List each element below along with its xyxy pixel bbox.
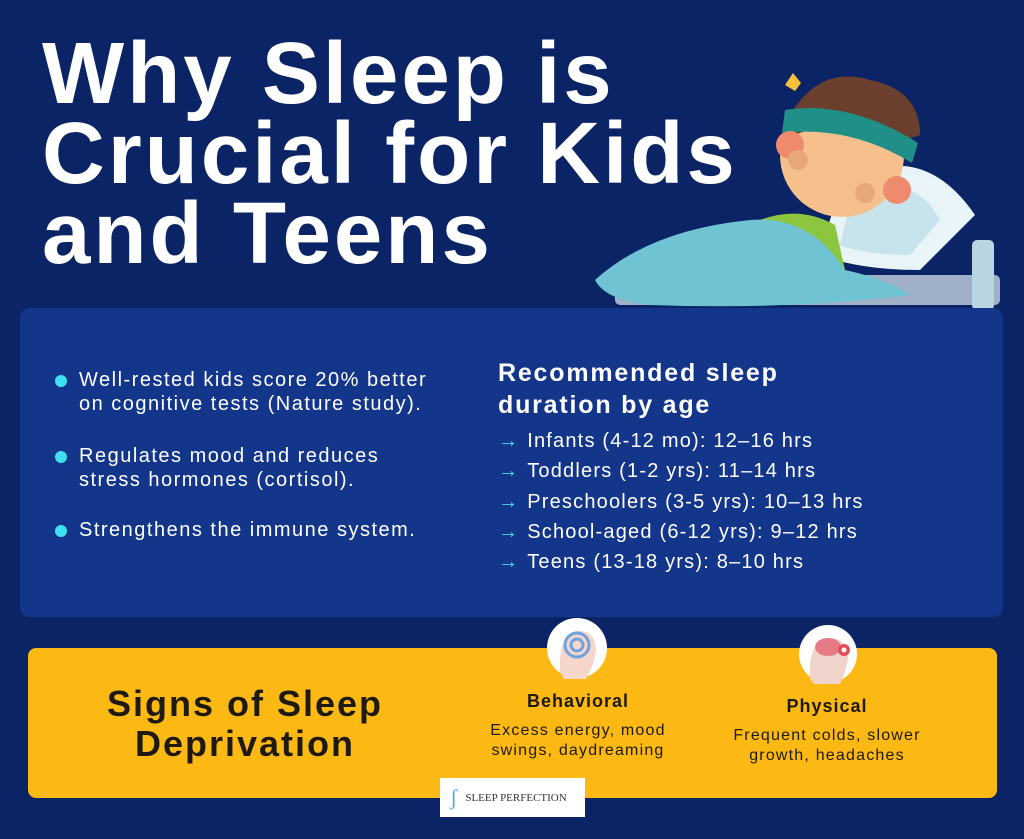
title: and Teens <box>42 185 493 282</box>
icon: physical head <box>799 625 857 684</box>
behavioral <box>490 691 666 759</box>
icon: behavioral head <box>547 618 607 679</box>
logo: sleep perfection <box>440 778 585 817</box>
heading: signs <box>107 683 383 764</box>
heading: signs: Signs of Sleep <box>107 683 383 724</box>
title: Crucial for Kids <box>42 105 738 202</box>
text: → Teens (13-18 yrs): 8–10 hrs <box>498 551 804 573</box>
physical: Frequent colds, slower <box>733 727 921 744</box>
behavioral: Behavioral <box>527 691 629 711</box>
text: → Preschoolers (3-5 yrs): 10–13 hrs <box>498 491 864 513</box>
pillow <box>820 166 975 270</box>
physical: growth, headaches <box>749 747 905 764</box>
physical <box>733 696 921 764</box>
text: → Infants (4-12 mo): 12–16 hrs <box>498 430 813 452</box>
bullet 2 <box>60 444 379 492</box>
bullet 1 <box>60 368 427 416</box>
physical: Physical <box>786 696 868 716</box>
head <box>776 73 920 217</box>
bullet 3: Strengthens the immune system. <box>79 519 416 541</box>
panel: facts <box>20 308 1003 617</box>
illustration: sleeping kid <box>595 73 1000 308</box>
bed frame <box>615 240 1000 310</box>
text: → School-aged (6-12 yrs): 9–12 hrs <box>498 521 858 543</box>
heading: recommended sleep: Recommended sleep <box>498 359 779 387</box>
heading: recommended sleep <box>498 359 779 419</box>
logo: sleep perfection: SLEEP PERFECTION <box>465 792 567 804</box>
heading: recommended sleep: duration by age <box>498 391 711 419</box>
bullet 1: Well-rested kids score 20% better <box>79 369 427 391</box>
heading: signs: Deprivation <box>135 723 355 764</box>
logo: sleep perfection: ʃ <box>450 784 457 810</box>
bullet 1: on cognitive tests (Nature study). <box>79 393 422 415</box>
bullet 2: Regulates mood and reduces <box>79 445 379 467</box>
list: sleep durations <box>498 430 864 573</box>
behavioral: swings, daydreaming <box>491 742 665 759</box>
body and blanket <box>595 214 910 306</box>
bullet 2: stress hormones (cortisol). <box>79 469 355 491</box>
text: → Toddlers (1-2 yrs): 11–14 hrs <box>498 460 816 482</box>
panel: signs of sleep deprivation <box>28 648 997 798</box>
title <box>42 25 738 282</box>
title: Why Sleep is <box>42 25 615 122</box>
behavioral: Excess energy, mood <box>490 722 666 739</box>
